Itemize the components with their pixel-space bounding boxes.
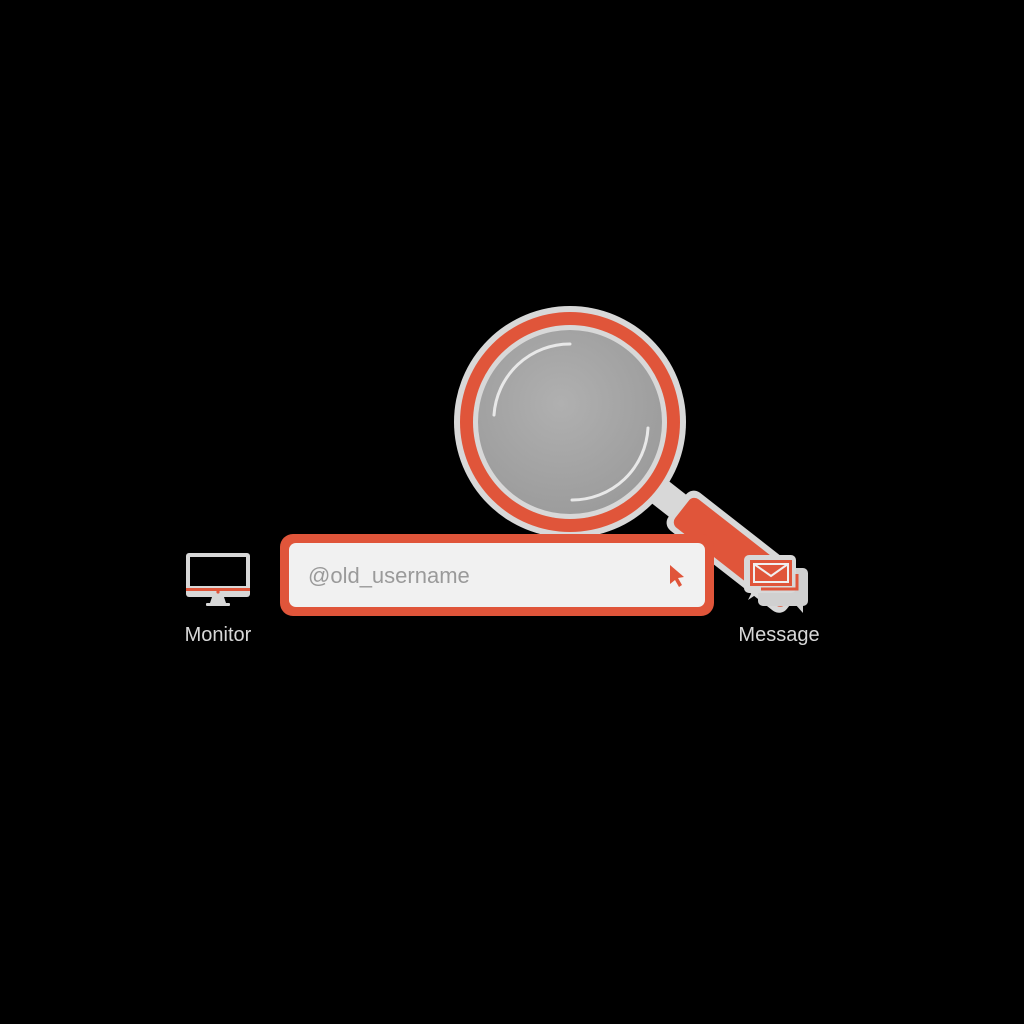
icon: message — [744, 555, 808, 613]
magnifier lens — [454, 306, 686, 538]
icon: cursor — [670, 565, 684, 587]
icon: monitor — [186, 553, 250, 606]
label: Monitor: Monitor — [185, 624, 252, 646]
search box: @old_username — [308, 563, 470, 588]
label: Message: Message — [738, 624, 820, 646]
search box — [280, 534, 714, 616]
magnifier handle — [640, 469, 810, 617]
